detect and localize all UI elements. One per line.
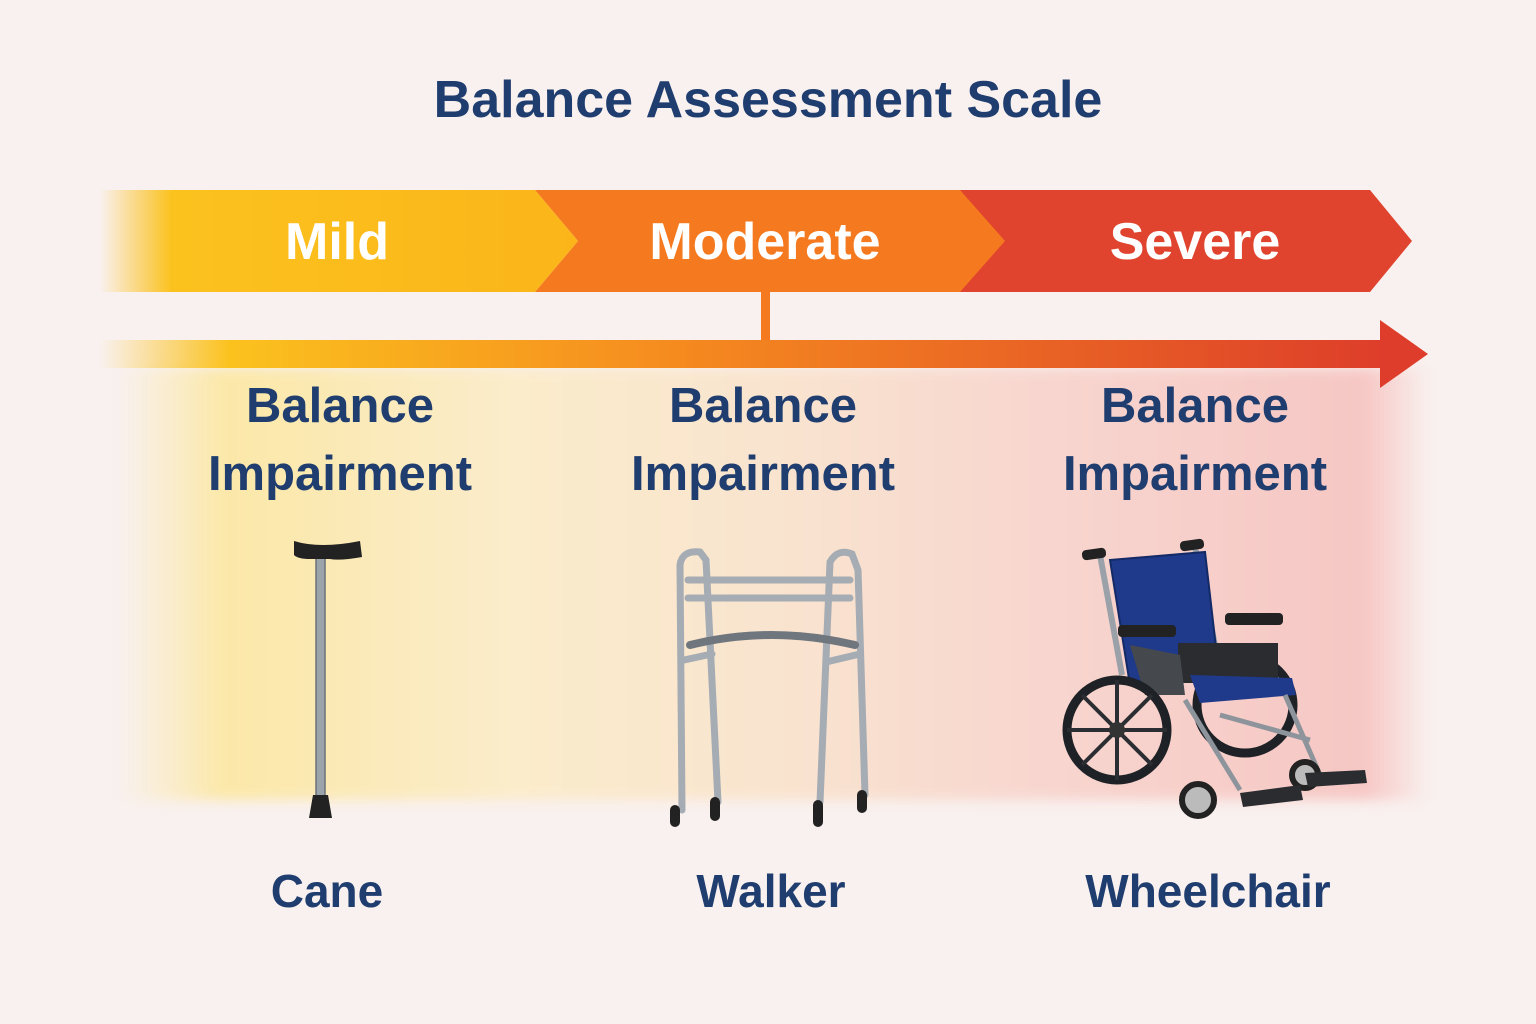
- text: severe impairment: [1063, 379, 1327, 501]
- severity banner: [103, 190, 1428, 388]
- chevron: severe: [960, 190, 1412, 292]
- chevron: moderate: [535, 190, 1005, 292]
- text: mild impairment: [208, 379, 472, 501]
- connector: [761, 292, 770, 342]
- text: severe impairment: Impairment: [1063, 447, 1327, 501]
- text: mild impairment: Impairment: [208, 447, 472, 501]
- label: Moderate: Moderate: [649, 213, 881, 271]
- text: mild impairment: Balance: [246, 379, 434, 433]
- title: Balance Assessment Scale: [434, 71, 1102, 129]
- text: moderate impairment: Balance: [669, 379, 857, 433]
- label: Mild: Mild: [285, 213, 389, 271]
- chevron: mild: [100, 190, 578, 292]
- icon: cane: [294, 541, 362, 818]
- label: Wheelchair: Wheelchair: [1085, 865, 1331, 917]
- label: Severe: Severe: [1110, 213, 1280, 271]
- icon: wheelchair: [1062, 538, 1367, 819]
- label: Walker: Walker: [696, 865, 846, 917]
- text: severe impairment: Balance: [1101, 379, 1289, 433]
- text: moderate impairment: [631, 379, 895, 501]
- arrow: [100, 320, 1428, 388]
- icon: walker: [670, 548, 868, 827]
- text: moderate impairment: Impairment: [631, 447, 895, 501]
- background gradient panel: [120, 368, 1430, 800]
- label: Cane: Cane: [271, 865, 383, 917]
